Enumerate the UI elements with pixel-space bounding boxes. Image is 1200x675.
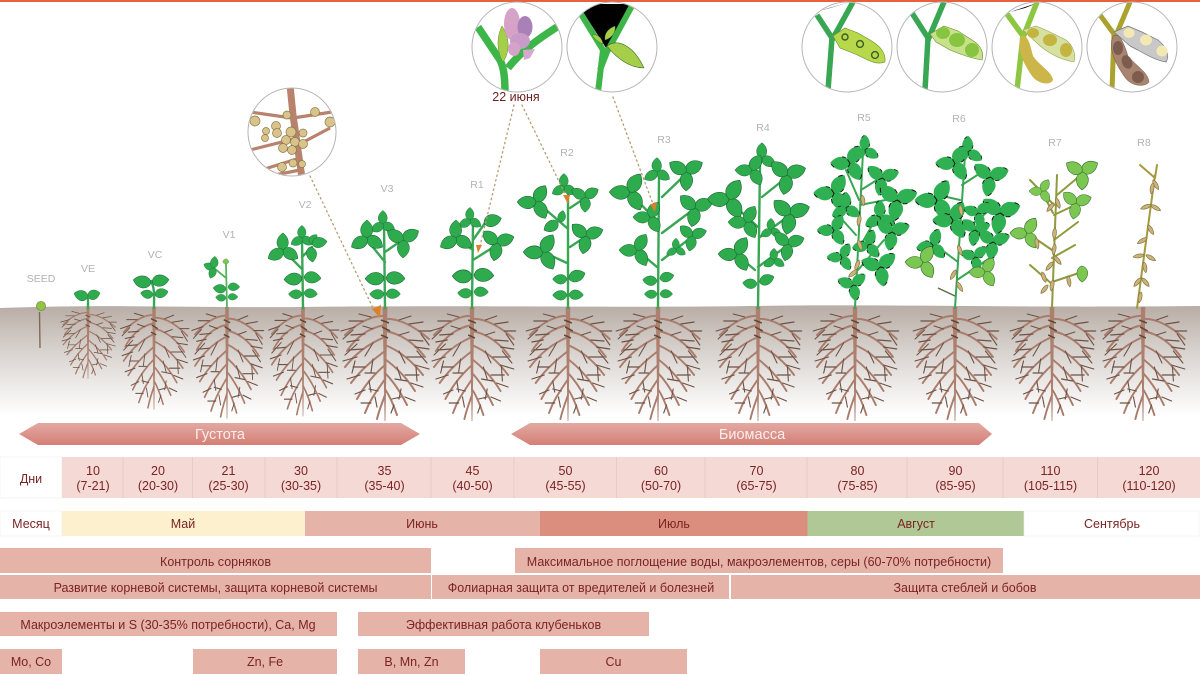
days row: (30-35) — [281, 479, 321, 493]
inset: pod R8 — [1087, 2, 1177, 92]
soil background — [0, 305, 1200, 425]
bar: maximum uptake — [515, 548, 1003, 573]
bar: stem and pod protection — [731, 575, 1200, 599]
days row: (40-50) — [452, 479, 493, 493]
plant R6 — [899, 136, 1028, 308]
stage labels — [27, 112, 1151, 285]
months row: Июнь — [406, 517, 438, 531]
days row: 45 — [466, 464, 479, 478]
days row: (45-55) — [545, 479, 586, 493]
inset: pod R6 — [897, 2, 987, 92]
days row: (105-115) — [1024, 479, 1077, 493]
plant V2 — [266, 225, 328, 308]
days row: 110 — [1041, 464, 1061, 478]
plant R4 — [701, 143, 817, 308]
days row: (65-75) — [736, 479, 777, 493]
days row: 10 — [86, 464, 100, 478]
bar: root development: Развитие корневой системы, защита корневой системы — [54, 581, 377, 595]
top accent bar — [0, 0, 1200, 2]
plant R1 — [438, 207, 520, 308]
plant VC — [132, 274, 170, 308]
days row: 90 — [949, 464, 962, 478]
inset: pod R7 — [992, 2, 1082, 92]
bar: Mo, Co — [0, 649, 62, 674]
stage labels: V2 — [299, 199, 312, 211]
days row: 60 — [654, 464, 668, 478]
days row: 35 — [378, 464, 391, 478]
plant R5 — [807, 135, 925, 308]
plant R7 — [1005, 147, 1107, 308]
arrow banner: biomass — [511, 423, 992, 445]
days row: (75-85) — [837, 479, 878, 493]
days row: 21 — [222, 464, 235, 478]
stage labels: V3 — [381, 183, 394, 195]
stage labels: R2 — [560, 147, 574, 159]
bar: Cu: Cu — [606, 655, 622, 669]
inset: flower R3 — [567, 2, 657, 92]
bar: Zn, Fe — [193, 649, 337, 674]
stage labels: R8 — [1137, 137, 1151, 149]
stage labels: VC — [148, 249, 163, 261]
months row: Июль — [658, 517, 690, 531]
bar: foliar protection: Фолиарная защита от вредителей и болезней — [448, 581, 714, 595]
bar: nodule function — [358, 612, 649, 636]
bar: B, Mn, Zn — [358, 649, 465, 674]
days row: (50-70) — [641, 479, 681, 493]
days row: 120 — [1139, 464, 1159, 478]
days row: Дни — [20, 472, 42, 486]
bar: root development — [0, 575, 431, 599]
dotted leader arrows — [310, 97, 657, 318]
bar: Mo, Co: Mo, Co — [11, 655, 51, 669]
bar: weed control: Контроль сорняков — [160, 555, 271, 569]
stage labels: R7 — [1048, 137, 1062, 149]
days row: 80 — [851, 464, 864, 478]
stage labels: SEED — [27, 273, 56, 285]
plant R8 — [1132, 165, 1161, 308]
days row: (7-21) — [76, 479, 110, 493]
plant V1 — [203, 256, 240, 308]
months row: Май — [171, 517, 195, 531]
stage labels: V1 — [223, 229, 236, 241]
days row: (35-40) — [364, 479, 405, 493]
stage labels: R3 — [657, 134, 671, 146]
bar: weed control — [0, 548, 431, 573]
arrow banner: biomass: Биомасса — [719, 427, 786, 443]
days row: 50 — [559, 464, 572, 478]
stage labels: R6 — [952, 113, 966, 125]
inset: pod R5 — [802, 2, 892, 92]
plant R2 — [512, 174, 609, 308]
stage labels: R4 — [756, 122, 770, 134]
inset: root nodules — [248, 85, 336, 178]
arrow banner: density: Густота — [195, 427, 246, 443]
months row: Месяц — [12, 517, 50, 531]
bar: maximum uptake: Максимальное поглощение воды, макроэлементов, серы (60-70% потребности) — [527, 555, 991, 569]
days row — [0, 457, 1200, 498]
plant R3 — [603, 146, 720, 308]
bar: Zn, Fe: Zn, Fe — [247, 655, 283, 669]
days row: (25-30) — [208, 479, 249, 493]
days row: 20 — [151, 464, 165, 478]
days row: 30 — [294, 464, 308, 478]
plant V3 — [349, 210, 428, 308]
days row: 70 — [750, 464, 763, 478]
stage labels: R5 — [857, 112, 871, 124]
bar: macronutrients: Макроэлементы и S (30-35% потребности), Ca, Mg — [20, 618, 316, 632]
days row: (110-120) — [1122, 479, 1176, 493]
months row — [0, 511, 1199, 536]
plant VE — [73, 288, 101, 308]
months row: Август — [897, 517, 935, 531]
bar: B, Mn, Zn: B, Mn, Zn — [384, 655, 439, 669]
bar: Cu — [540, 649, 687, 674]
days row: (20-30) — [138, 479, 178, 493]
date label: 22 июня — [492, 90, 540, 104]
root systems — [36, 302, 1187, 421]
stage labels: VE — [81, 263, 95, 275]
months row: Сентябрь — [1084, 517, 1140, 531]
arrow banner: density — [19, 423, 420, 445]
bar: foliar protection — [432, 575, 729, 599]
bar: nodule function: Эффективная работа клубеньков — [406, 618, 601, 632]
days row: (85-95) — [935, 479, 976, 493]
inset: flower R1-R2 — [472, 2, 562, 95]
bar: macronutrients — [0, 612, 337, 636]
bar: stem and pod protection: Защита стеблей и бобов — [893, 581, 1037, 595]
stage labels: R1 — [470, 179, 484, 191]
